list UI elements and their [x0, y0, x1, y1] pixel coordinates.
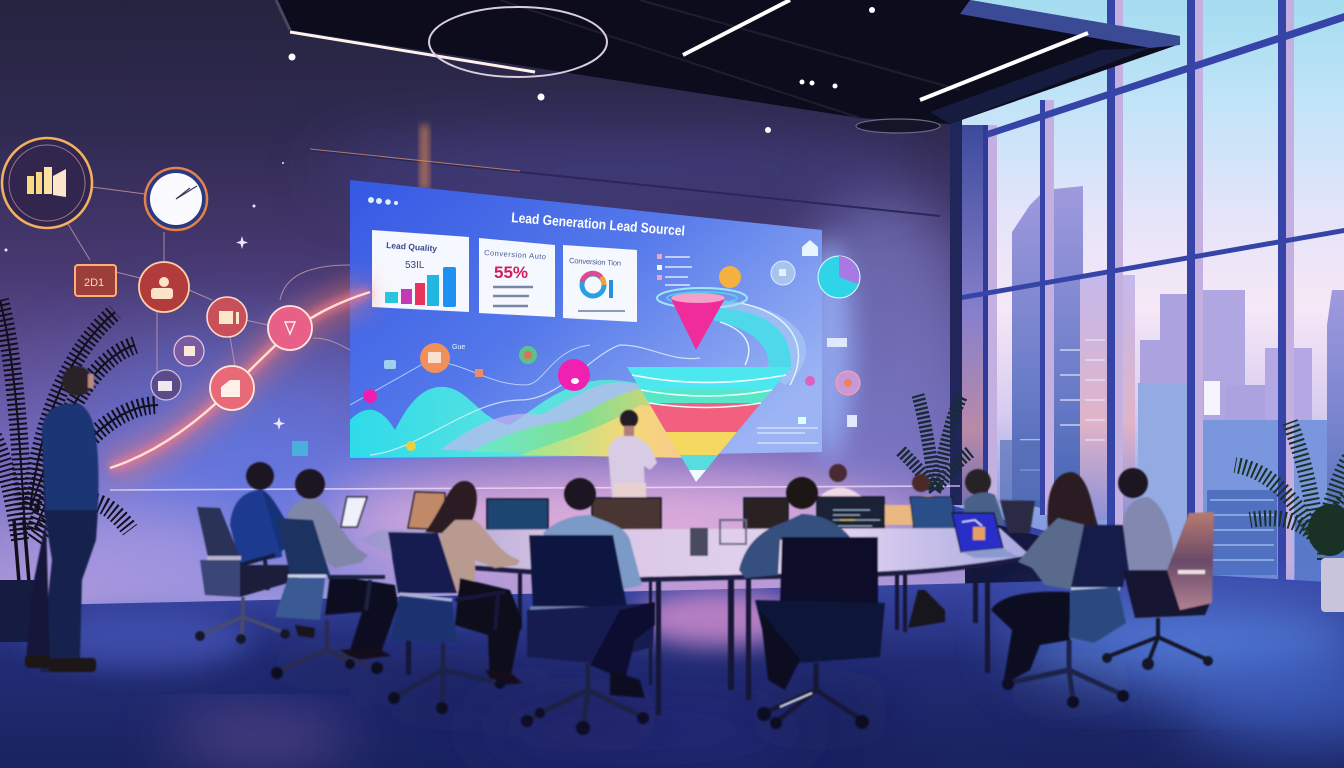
sparkles [4, 162, 308, 456]
card: lead quality bar chart: Lead Quality [386, 240, 438, 254]
back row people [819, 464, 1035, 533]
conference table [360, 520, 1030, 582]
back plant by window [900, 395, 970, 490]
ceiling [276, 0, 1180, 124]
dashboard title: Lead Generation Lead Sourcel [511, 209, 685, 239]
city window wall [950, 0, 1344, 590]
card: conversion rate 55%: 55% [494, 263, 528, 282]
chair floor shadows [250, 651, 1150, 735]
code monitor [817, 497, 884, 539]
attendee 5 with chair [739, 477, 885, 729]
back wall [0, 0, 970, 620]
icon: building node [151, 370, 181, 400]
standing man [25, 366, 98, 672]
card: lead quality bar chart: 53IL [405, 260, 425, 271]
window mullions [950, 0, 1344, 590]
white tablet [341, 497, 367, 527]
orange monitor [408, 492, 445, 530]
large lead funnel [627, 367, 791, 482]
attendee 2 with chair [271, 469, 398, 679]
presenter [608, 410, 657, 497]
right palm plant [1235, 422, 1344, 612]
bright laptop [952, 513, 1018, 558]
attendee 1 with chair [195, 462, 315, 644]
card: conversion donut [563, 245, 637, 322]
blue monitor right [910, 497, 957, 548]
left palm plant [0, 300, 158, 642]
area waves [350, 345, 700, 458]
table legs [406, 568, 990, 715]
wall display screen [350, 180, 860, 482]
blue monitor [487, 499, 548, 549]
right side nodes and text lines [757, 240, 860, 443]
card: conversion rate 55% [479, 238, 555, 317]
small top funnel [657, 288, 747, 350]
attendee 7 with chair [1102, 468, 1214, 670]
icon: clock [145, 168, 207, 230]
floor [0, 577, 1344, 768]
icon: ticket box: 2D1 [84, 277, 104, 289]
icon: shield node [268, 306, 312, 350]
attendee 3 woman with chair [388, 481, 522, 714]
monitors and laptops [341, 492, 957, 551]
glowing lead path [110, 292, 370, 468]
pie chart [818, 256, 860, 298]
wall accent lines and orange glow [110, 125, 960, 490]
seated group [25, 366, 1214, 735]
attendee 4 with chair [521, 478, 655, 735]
attendee 6 woman with chair [991, 472, 1133, 708]
card: lead quality bar chart [372, 230, 469, 312]
icon: small note node [174, 336, 204, 366]
swirl ribbon [712, 300, 806, 385]
skyline buildings [1000, 186, 1344, 585]
screen nodes [363, 261, 795, 451]
card: conversion rate 55%: Conversion Auto [484, 248, 546, 261]
icon: person node [139, 262, 189, 312]
screen nodes: Gue [452, 344, 465, 351]
icon: ticket box [75, 265, 116, 296]
icon: folder node [207, 297, 247, 337]
card: conversion donut: Conversion Tion [569, 256, 621, 268]
window control dots [368, 197, 398, 205]
back laptop [885, 505, 915, 525]
icon: bar chart ring [2, 138, 92, 228]
legend lines [657, 254, 692, 285]
icon: house node [210, 366, 254, 410]
brown monitor [592, 498, 661, 551]
dark monitor [744, 498, 788, 550]
seated woman's feet at far side [908, 590, 945, 628]
left network lines [68, 187, 350, 372]
ceiling lights [288, 0, 1088, 133]
